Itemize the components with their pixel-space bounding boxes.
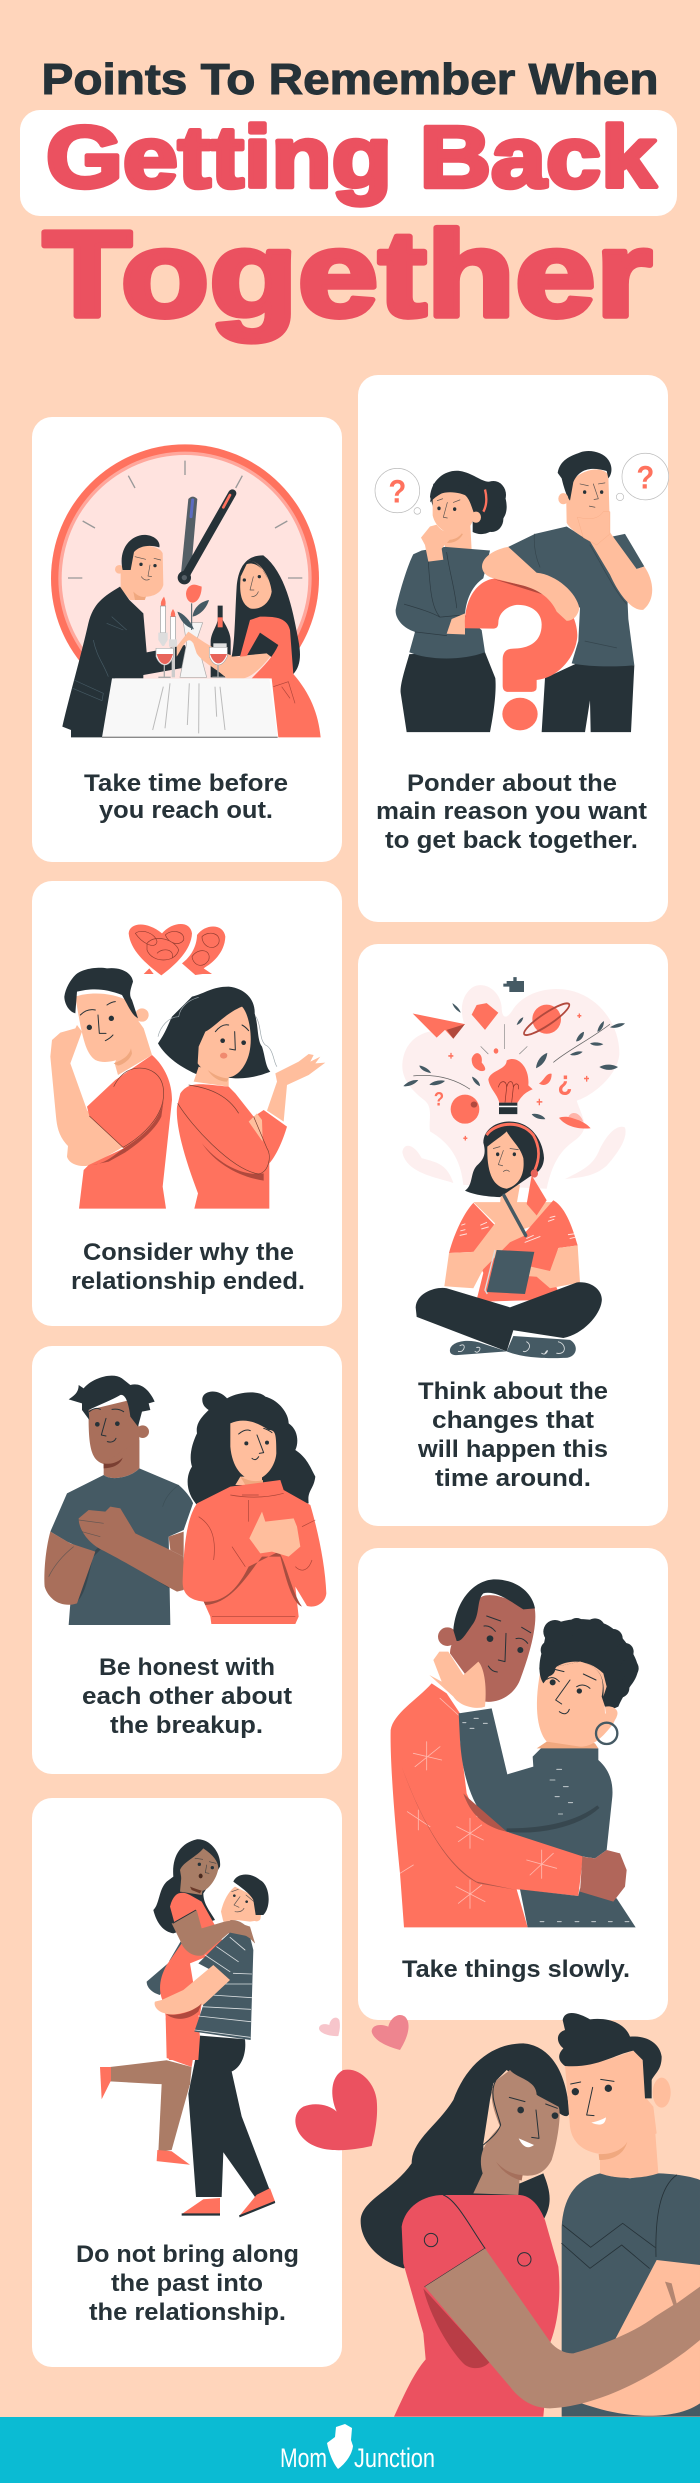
caption: Do not bring along — [76, 2241, 299, 2268]
caption: each other about — [82, 1683, 292, 1710]
panel: do not bring along the past — [32, 1798, 342, 2367]
title line: Points To Remember When: Points To Remember When — [42, 55, 658, 104]
caption: Think about the — [418, 1378, 608, 1405]
illustration: embracing couple in sweaters — [391, 1579, 639, 1927]
illustration: couple at dinner under a clock — [51, 444, 321, 737]
panel: ponder about the main reason — [358, 375, 669, 922]
caption: time around. — [435, 1465, 591, 1492]
caption — [76, 2241, 299, 2326]
logo: MomJunction — [280, 2424, 435, 2473]
illustration: man lifting woman — [100, 1839, 275, 2216]
caption: relationship ended. — [71, 1268, 305, 1295]
caption — [417, 1378, 608, 1492]
illustration: woman journaling with thought cloud: ? — [434, 1088, 444, 1110]
illustration: woman journaling with thought cloud — [402, 977, 626, 1358]
caption: the past into — [111, 2270, 263, 2297]
illustration: woman journaling with thought cloud: ¿ — [558, 1067, 572, 1096]
title — [20, 55, 677, 342]
illustration: couple with hands on hearts — [44, 1376, 326, 1625]
caption — [71, 1239, 305, 1295]
panel: be honest with each other — [32, 1346, 342, 1774]
caption: the breakup. — [110, 1712, 263, 1739]
logo: MomJunction: Junction — [354, 2443, 435, 2473]
panel: consider why the relationship ended — [32, 881, 342, 1326]
caption: Take time before — [84, 770, 288, 797]
illustration: couple thinking with question mark — [375, 451, 669, 732]
illustration: couple back to back with tangled hearts — [50, 924, 325, 1209]
figure: woman — [361, 2043, 569, 2417]
footer banner — [0, 2417, 700, 2483]
panel: take things slowly — [358, 1548, 668, 2020]
logo: MomJunction: Mom — [280, 2443, 327, 2473]
caption: main reason you want — [376, 798, 647, 825]
panel: take time before you reach out — [32, 417, 342, 862]
illustration: couple thinking with question mark: ? — [636, 459, 654, 496]
caption — [376, 770, 647, 854]
caption: changes that — [432, 1407, 594, 1434]
figure: man — [558, 2013, 700, 2417]
illustration: couple and hearts at the bottom — [295, 2013, 700, 2417]
caption — [82, 1654, 292, 1739]
icon: small pale heart — [319, 2018, 340, 2036]
title highlight box: Getting Back — [46, 109, 657, 206]
caption: you reach out. — [99, 797, 273, 824]
caption — [84, 770, 288, 824]
figure legs and shoes — [100, 2004, 275, 2216]
caption: to get back together. — [385, 827, 638, 854]
caption: the relationship. — [89, 2299, 286, 2326]
caption: Consider why the — [83, 1239, 294, 1266]
caption: Be honest with — [99, 1654, 275, 1681]
caption: Take things slowly. — [402, 1956, 630, 1983]
illustration: couple thinking with question mark: ? — [388, 473, 406, 510]
caption: Ponder about the — [407, 770, 617, 797]
icon: medium pink heart — [372, 2015, 409, 2050]
caption: will happen this — [417, 1436, 608, 1463]
icon: large red heart — [295, 2070, 377, 2150]
figure: woman's arm — [425, 2248, 700, 2408]
icon: mother and baby in heart — [327, 2424, 353, 2469]
title line: Together: Together — [43, 206, 652, 342]
figure upper bodies — [147, 1839, 269, 2060]
panel: think about the changes — [358, 944, 668, 1526]
